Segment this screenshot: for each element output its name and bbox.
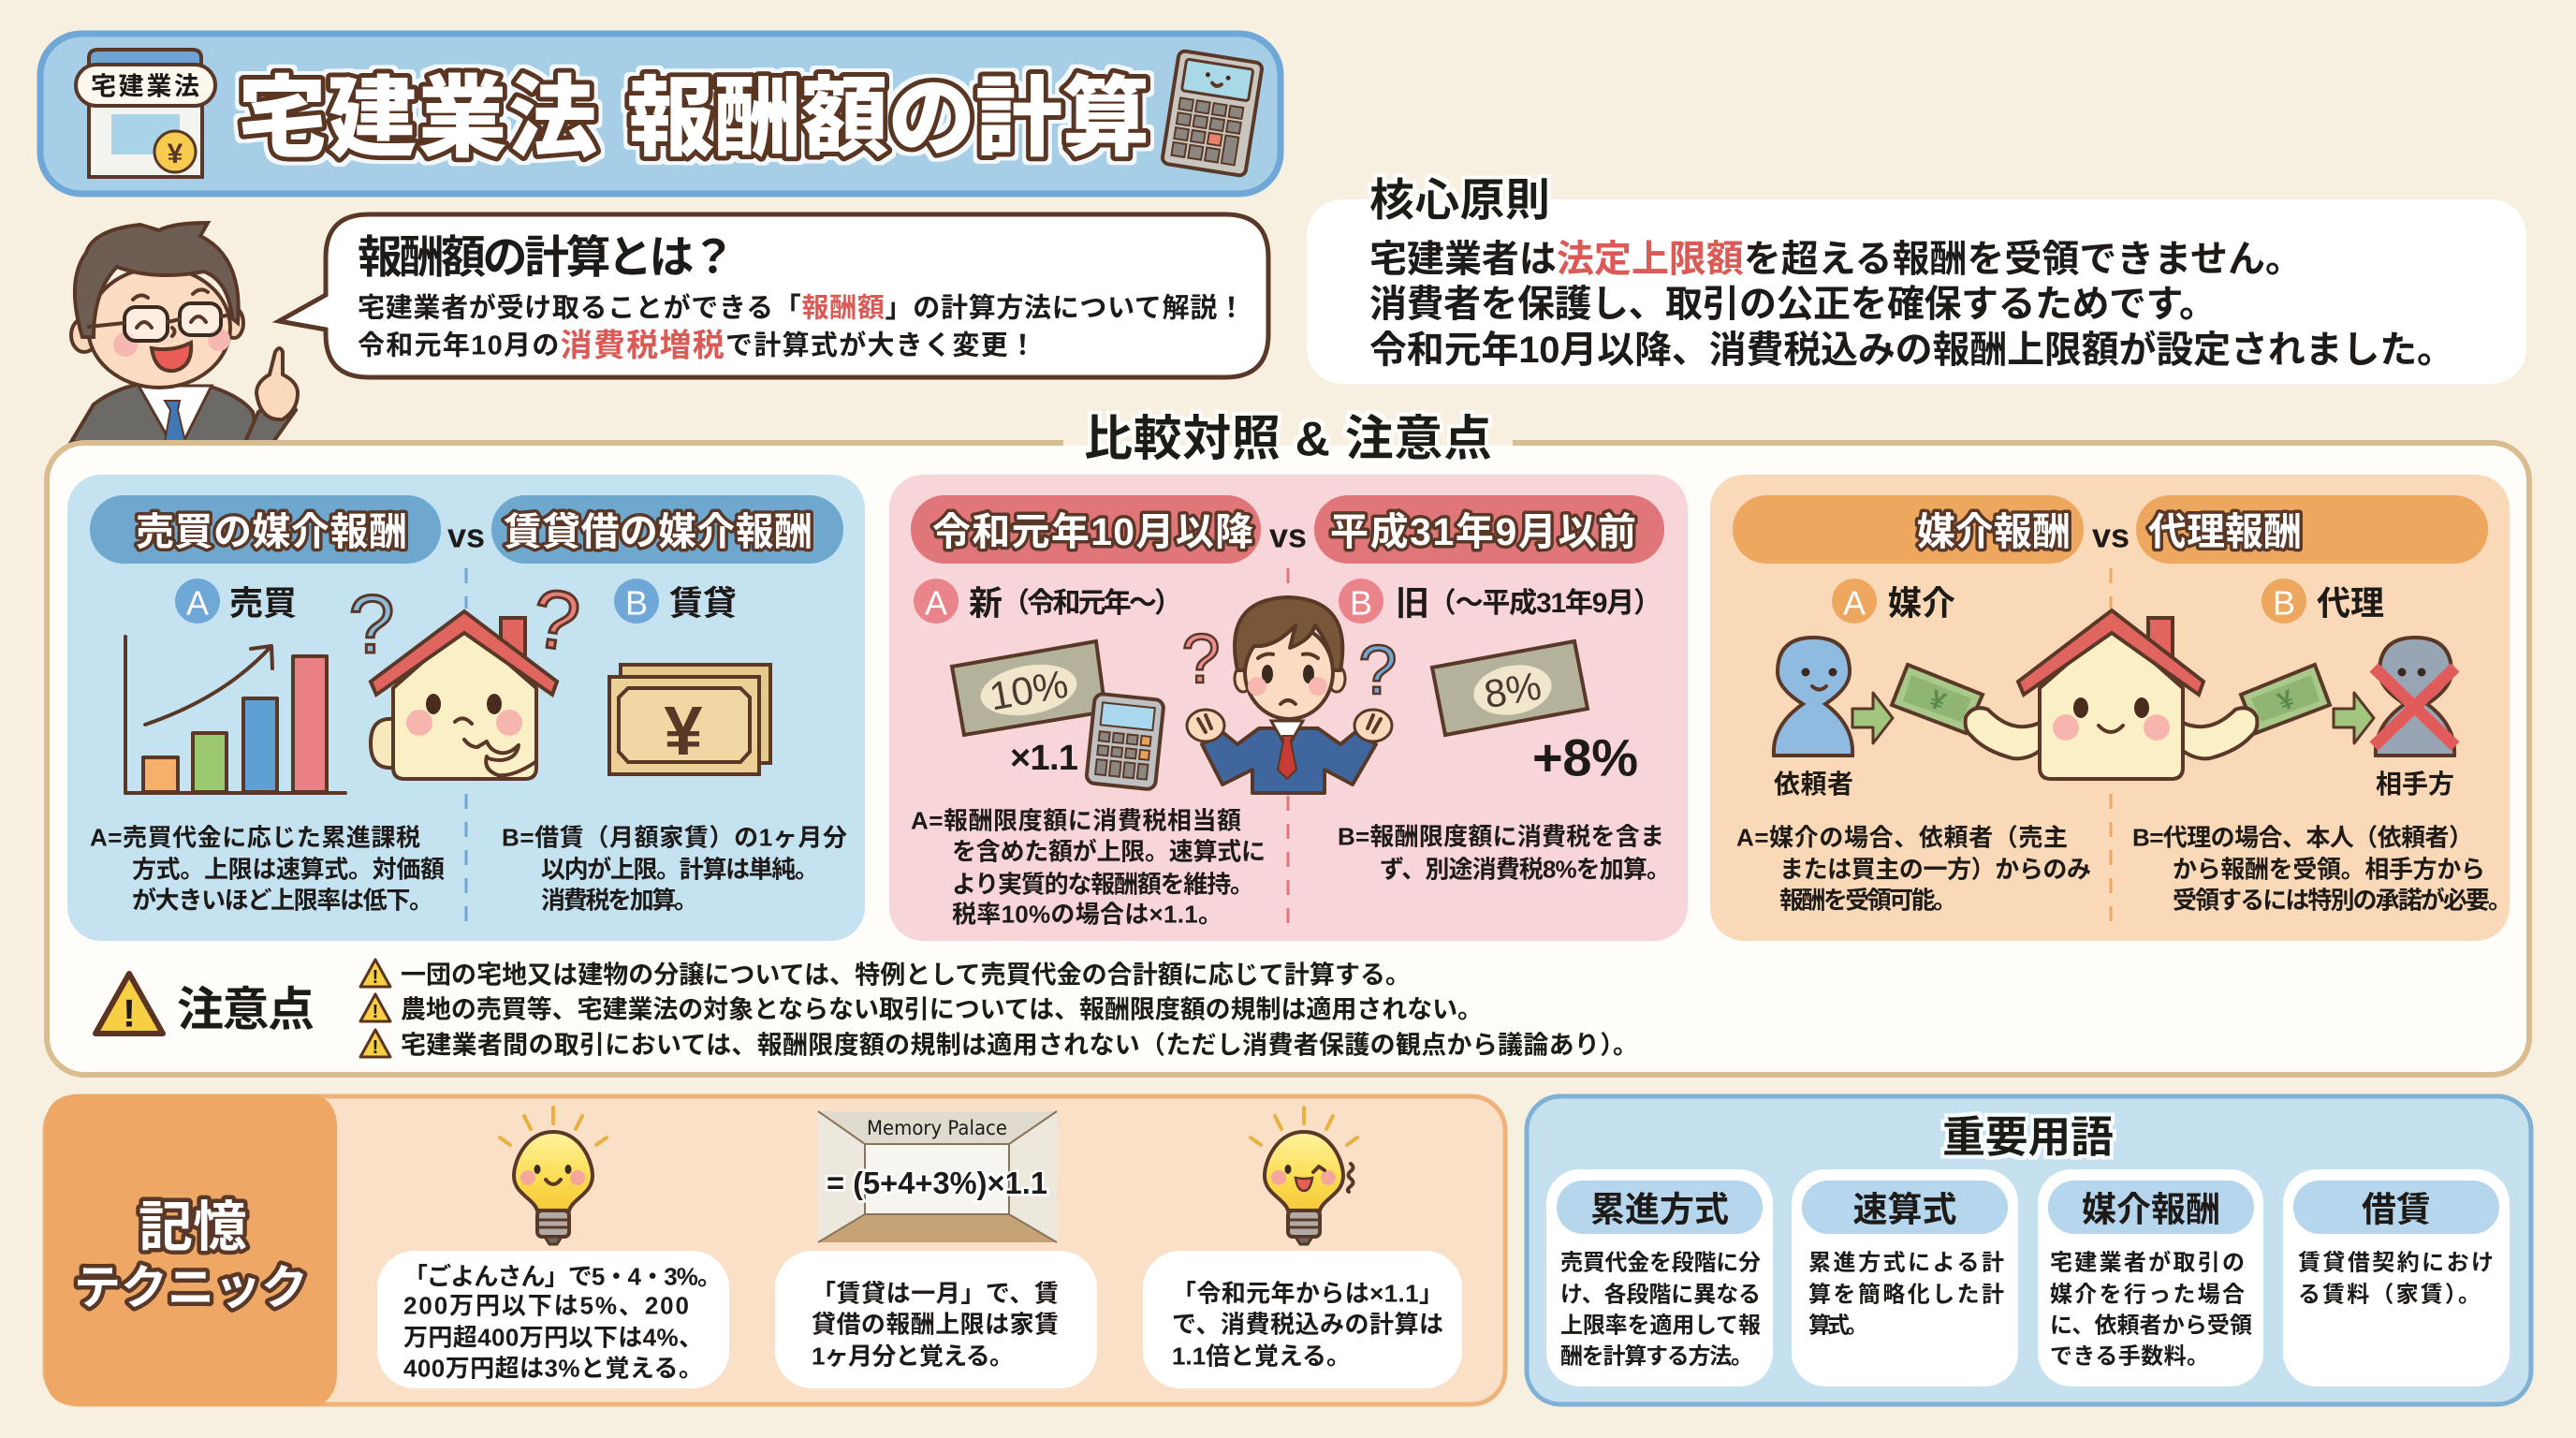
tab: memory techniques bbox=[45, 1094, 337, 1406]
icon: thinking house bbox=[371, 611, 557, 779]
term card: progressive method: 上限率を適用して報 bbox=[1560, 1313, 1761, 1339]
arrow: bill to counterparty bbox=[2334, 693, 2374, 743]
card: rent tip: 「賃貸は一月」で、賃 bbox=[812, 1279, 1059, 1307]
term card: progressive method bbox=[1546, 1169, 1773, 1387]
text A sale: 方式。上限は速算式。対価額 bbox=[132, 855, 445, 883]
core principle text: 宅建業者は法定上限額を超える報酬を受領できません。 bbox=[1369, 239, 2303, 280]
text B agency bbox=[2132, 823, 2512, 914]
exclamation mark: ! bbox=[123, 991, 136, 1035]
core principle text bbox=[1369, 239, 2454, 371]
caution list: 一団の宅地又は建物の分譲については、特例として売買代金の合計額に応じて計算する。 bbox=[401, 961, 1411, 989]
text A sale: A=売買代金に応じた累進課税 bbox=[90, 823, 420, 851]
card: gojonsan tip bbox=[377, 1251, 729, 1388]
header pills: 令和元年10月以降 bbox=[932, 510, 1253, 553]
header pills: 媒介報酬 bbox=[1917, 510, 2071, 553]
icon: calculator bbox=[1162, 51, 1263, 176]
card: gojonsan tip: 400万円超は3%と覚える。 bbox=[403, 1354, 703, 1382]
caution list: ! bbox=[373, 1037, 378, 1058]
card: gojonsan tip: 200万円以下は5%、200 bbox=[403, 1291, 689, 1319]
label B agency: 代理 bbox=[2317, 583, 2384, 622]
icon: bill left: ¥ bbox=[1925, 684, 1950, 716]
text A new bbox=[911, 806, 1266, 928]
panel: brokerage vs agency bbox=[1710, 475, 2512, 941]
bubble heading: 報酬額の計算とは？ bbox=[358, 233, 736, 283]
term card: quick formula bbox=[1792, 1169, 2018, 1387]
header pills: 代理報酬 bbox=[2148, 510, 2302, 553]
label A brokerage: A bbox=[1843, 583, 1866, 622]
text B lease: 消費税を加算。 bbox=[541, 886, 698, 914]
label B lease: B bbox=[625, 583, 648, 622]
label A new: 新（令和元年〜） bbox=[969, 583, 1182, 622]
label: counterparty: 相手方 bbox=[2376, 770, 2454, 799]
label B agency bbox=[2261, 579, 2384, 624]
header pills bbox=[911, 495, 1664, 564]
icon: question marks bbox=[349, 571, 585, 670]
label plus 8 percent: +8% bbox=[1532, 727, 1638, 786]
character: smiling man in suit pointing bbox=[71, 223, 298, 442]
term card: rent bbox=[2283, 1169, 2510, 1387]
text A new: 税率10%の場合は×1.1。 bbox=[952, 900, 1222, 928]
caution list: ! bbox=[373, 967, 378, 988]
text B agency: から報酬を受領。相手方から bbox=[2173, 855, 2485, 883]
icon: client person bbox=[1774, 638, 1852, 756]
caution heading: 注意点 bbox=[177, 983, 315, 1035]
label B agency: B bbox=[2273, 583, 2295, 622]
memory palace room bbox=[818, 1111, 1057, 1242]
text B old bbox=[1338, 822, 1671, 883]
icon: big warning triangle bbox=[95, 974, 163, 1034]
text A sale bbox=[90, 823, 445, 914]
panel: memory techniques bbox=[45, 1094, 1505, 1406]
icon: calculator bbox=[1086, 693, 1164, 790]
term card: progressive method: け、各段階に異なる bbox=[1560, 1282, 1761, 1308]
icon: question marks bbox=[1181, 620, 1398, 709]
term card: brokerage fee: 媒介報酬 bbox=[2082, 1190, 2220, 1228]
icon: bill left bbox=[1892, 665, 1983, 733]
icon: bill right bbox=[2241, 665, 2330, 733]
text B lease bbox=[502, 823, 847, 914]
term card: rent: 賃貸借契約におけ bbox=[2298, 1251, 2494, 1276]
text A brokerage: または買主の一方）からのみ bbox=[1779, 855, 2091, 883]
icon: counterparty person crossed out bbox=[2374, 638, 2455, 756]
card: rent tip: 貸借の報酬上限は家賃 bbox=[812, 1310, 1059, 1338]
title text bbox=[238, 69, 1149, 169]
text A brokerage bbox=[1736, 823, 2091, 914]
header pills: 売買の媒介報酬 bbox=[136, 510, 407, 553]
icon: smiling lightbulb bbox=[500, 1108, 607, 1244]
label A brokerage: 媒介 bbox=[1888, 583, 1955, 622]
icon: yen bills: ¥ bbox=[664, 692, 703, 770]
label A new: A bbox=[925, 583, 947, 622]
header pills: vs bbox=[447, 516, 485, 554]
icon: law book with yen coin bbox=[76, 50, 215, 177]
header pills: vs bbox=[2092, 516, 2130, 554]
icon: law book with yen coin: ¥ bbox=[168, 139, 183, 169]
bubble text bbox=[358, 291, 1245, 363]
bubble text: 宅建業者が受け取ることができる「報酬額」の計算方法について解説！ bbox=[358, 291, 1245, 323]
term card: progressive method: 累進方式 bbox=[1590, 1190, 1729, 1228]
tab: memory techniques: テクニック bbox=[74, 1262, 308, 1314]
text A brokerage: A=媒介の場合、依頼者（売主 bbox=[1736, 823, 2068, 851]
icon: question marks: ? bbox=[1181, 620, 1221, 697]
memory palace room: Memory Palace bbox=[867, 1117, 1007, 1139]
icon: law book with yen coin: 宅建業法 bbox=[91, 72, 199, 100]
panel: sale vs lease bbox=[67, 475, 865, 941]
memory palace room: = (5+4+3%)×1.1 bbox=[827, 1166, 1047, 1200]
term card: brokerage fee: できる手数料。 bbox=[2050, 1344, 2209, 1370]
core principle text: 消費者を保護し、取引の公正を確保するためです。 bbox=[1369, 284, 2217, 325]
term card: progressive method: 売買代金を段階に分 bbox=[1560, 1251, 1761, 1276]
label B old: 旧（〜平成31年9月） bbox=[1396, 583, 1661, 622]
label B old: B bbox=[1350, 583, 1372, 622]
icon: question marks: ? bbox=[349, 578, 394, 670]
label A new bbox=[914, 579, 1182, 624]
term card: brokerage fee: 宅建業者が取引の bbox=[2050, 1250, 2245, 1276]
text A new: より実質的な報酬額を維持。 bbox=[952, 870, 1254, 898]
term card: brokerage fee bbox=[2038, 1169, 2263, 1387]
title text: 宅建業法 bbox=[238, 69, 597, 169]
term card: rent: る賃料（家賃）。 bbox=[2298, 1283, 2481, 1308]
header pills bbox=[1733, 495, 2488, 564]
caution list: ! bbox=[373, 1002, 378, 1022]
icon: winking lightbulb bbox=[1251, 1108, 1357, 1244]
card: reiwa tip bbox=[1143, 1251, 1462, 1388]
text B lease: B=借賃（月額家賃）の1ヶ月分 bbox=[502, 823, 847, 851]
core principle text: 令和元年10月以降、消費税込みの報酬上限額が設定されました。 bbox=[1369, 330, 2454, 371]
cautions bbox=[95, 960, 1638, 1059]
term card: quick formula: 累進方式による計 bbox=[1808, 1251, 2004, 1276]
icon: 8 percent bill: 8% bbox=[1481, 664, 1544, 716]
section heading: 比較対照 & 注意点 bbox=[1084, 413, 1492, 467]
icon: happy house with arms bbox=[1966, 610, 2257, 779]
icon: 10 percent bill: 10% bbox=[987, 662, 1071, 718]
text B old: ず、別途消費税8%を加算。 bbox=[1380, 855, 1671, 883]
text B agency: 受領するには特別の承諾が必要。 bbox=[2173, 886, 2512, 914]
tab: memory techniques: 記憶 bbox=[139, 1196, 247, 1257]
panel: core principle bbox=[1307, 176, 2526, 384]
key terms heading: 重要用語 bbox=[1942, 1112, 2114, 1161]
text A new: A=報酬限度額に消費税相当額 bbox=[911, 806, 1241, 834]
card: rent tip bbox=[775, 1251, 1097, 1388]
term card: rent: 借賃 bbox=[2362, 1190, 2431, 1228]
speech bubble bbox=[279, 214, 1268, 377]
heading: core principle: 核心原則 bbox=[1369, 176, 1550, 226]
label A sale: 売買 bbox=[229, 583, 297, 622]
label B lease bbox=[614, 579, 737, 624]
icon: question marks: ? bbox=[527, 571, 585, 668]
term card: brokerage fee: 媒介を行った場合 bbox=[2050, 1283, 2245, 1308]
text A brokerage: 報酬を受領可能。 bbox=[1779, 886, 1957, 914]
term card: quick formula: 速算式 bbox=[1853, 1190, 1956, 1228]
term card: quick formula: 算を簡略化した計 bbox=[1808, 1283, 2004, 1308]
character: confused man bbox=[1187, 597, 1392, 793]
card: gojonsan tip: 「ごよんさん」で5・4・3%。 bbox=[403, 1262, 722, 1290]
header pills bbox=[90, 495, 843, 564]
caution list bbox=[360, 960, 1638, 1059]
card: rent tip: 1ヶ月分と覚える。 bbox=[812, 1342, 1014, 1370]
icon: question marks: ? bbox=[1358, 631, 1398, 709]
label A sale: A bbox=[186, 583, 209, 622]
text B old: B=報酬限度額に消費税を含ま bbox=[1338, 822, 1664, 850]
text B agency: B=代理の場合、本人（依頼者） bbox=[2132, 823, 2473, 851]
title banner bbox=[40, 34, 1281, 194]
title text: 報酬額の計算 bbox=[627, 70, 1149, 168]
term card: progressive method: 酬を計算する方法。 bbox=[1560, 1344, 1753, 1370]
term card: brokerage fee: に、依頼者から受領 bbox=[2050, 1313, 2252, 1339]
panel: new vs old tax bbox=[889, 475, 1688, 941]
card: reiwa tip: で、消費税込みの計算は bbox=[1172, 1310, 1443, 1338]
header pills: 平成31年9月以前 bbox=[1330, 510, 1636, 553]
header pills: 賃貸借の媒介報酬 bbox=[504, 510, 812, 553]
caution list: 宅建業者間の取引においては、報酬限度額の規制は適用されない（ただし消費者保護の観点から議論あり）。 bbox=[401, 1031, 1638, 1059]
term card: quick formula: 算式。 bbox=[1808, 1313, 1868, 1339]
icon: yen bills bbox=[609, 665, 770, 774]
label: client: 依頼者 bbox=[1774, 770, 1853, 799]
bar chart rising bbox=[125, 637, 345, 793]
bubble text: 令和元年10月の消費税増税で計算式が大きく変更！ bbox=[358, 328, 1036, 363]
label times 1.1: ×1.1 bbox=[1010, 739, 1078, 778]
label A sale bbox=[175, 579, 297, 624]
card: reiwa tip: 1.1倍と覚える。 bbox=[1172, 1342, 1351, 1370]
caution list: 農地の売買等、宅建業法の対象とならない取引については、報酬限度額の規制は適用されない。 bbox=[401, 995, 1483, 1023]
label B lease: 賃貸 bbox=[669, 583, 737, 622]
icon: bill right: ¥ bbox=[2274, 684, 2298, 716]
text A sale: が大きいほど上限率は低下。 bbox=[132, 886, 433, 914]
label A brokerage bbox=[1832, 579, 1955, 624]
card: reiwa tip: 「令和元年からは×1.1」 bbox=[1172, 1279, 1443, 1307]
panel: comparison and cautions bbox=[47, 413, 2529, 1075]
icon: 8 percent bill bbox=[1432, 641, 1588, 735]
text A new: を含めた額が上限。速算式に bbox=[952, 837, 1266, 865]
card: gojonsan tip: 万円超400万円以下は4%、 bbox=[403, 1323, 703, 1351]
arrow: client to bill bbox=[1852, 693, 1893, 743]
panel: key terms bbox=[1527, 1096, 2531, 1404]
icon: 10 percent bill bbox=[952, 641, 1105, 735]
header pills: vs bbox=[1269, 516, 1307, 554]
text B lease: 以内が上限。計算は単純。 bbox=[541, 855, 819, 883]
